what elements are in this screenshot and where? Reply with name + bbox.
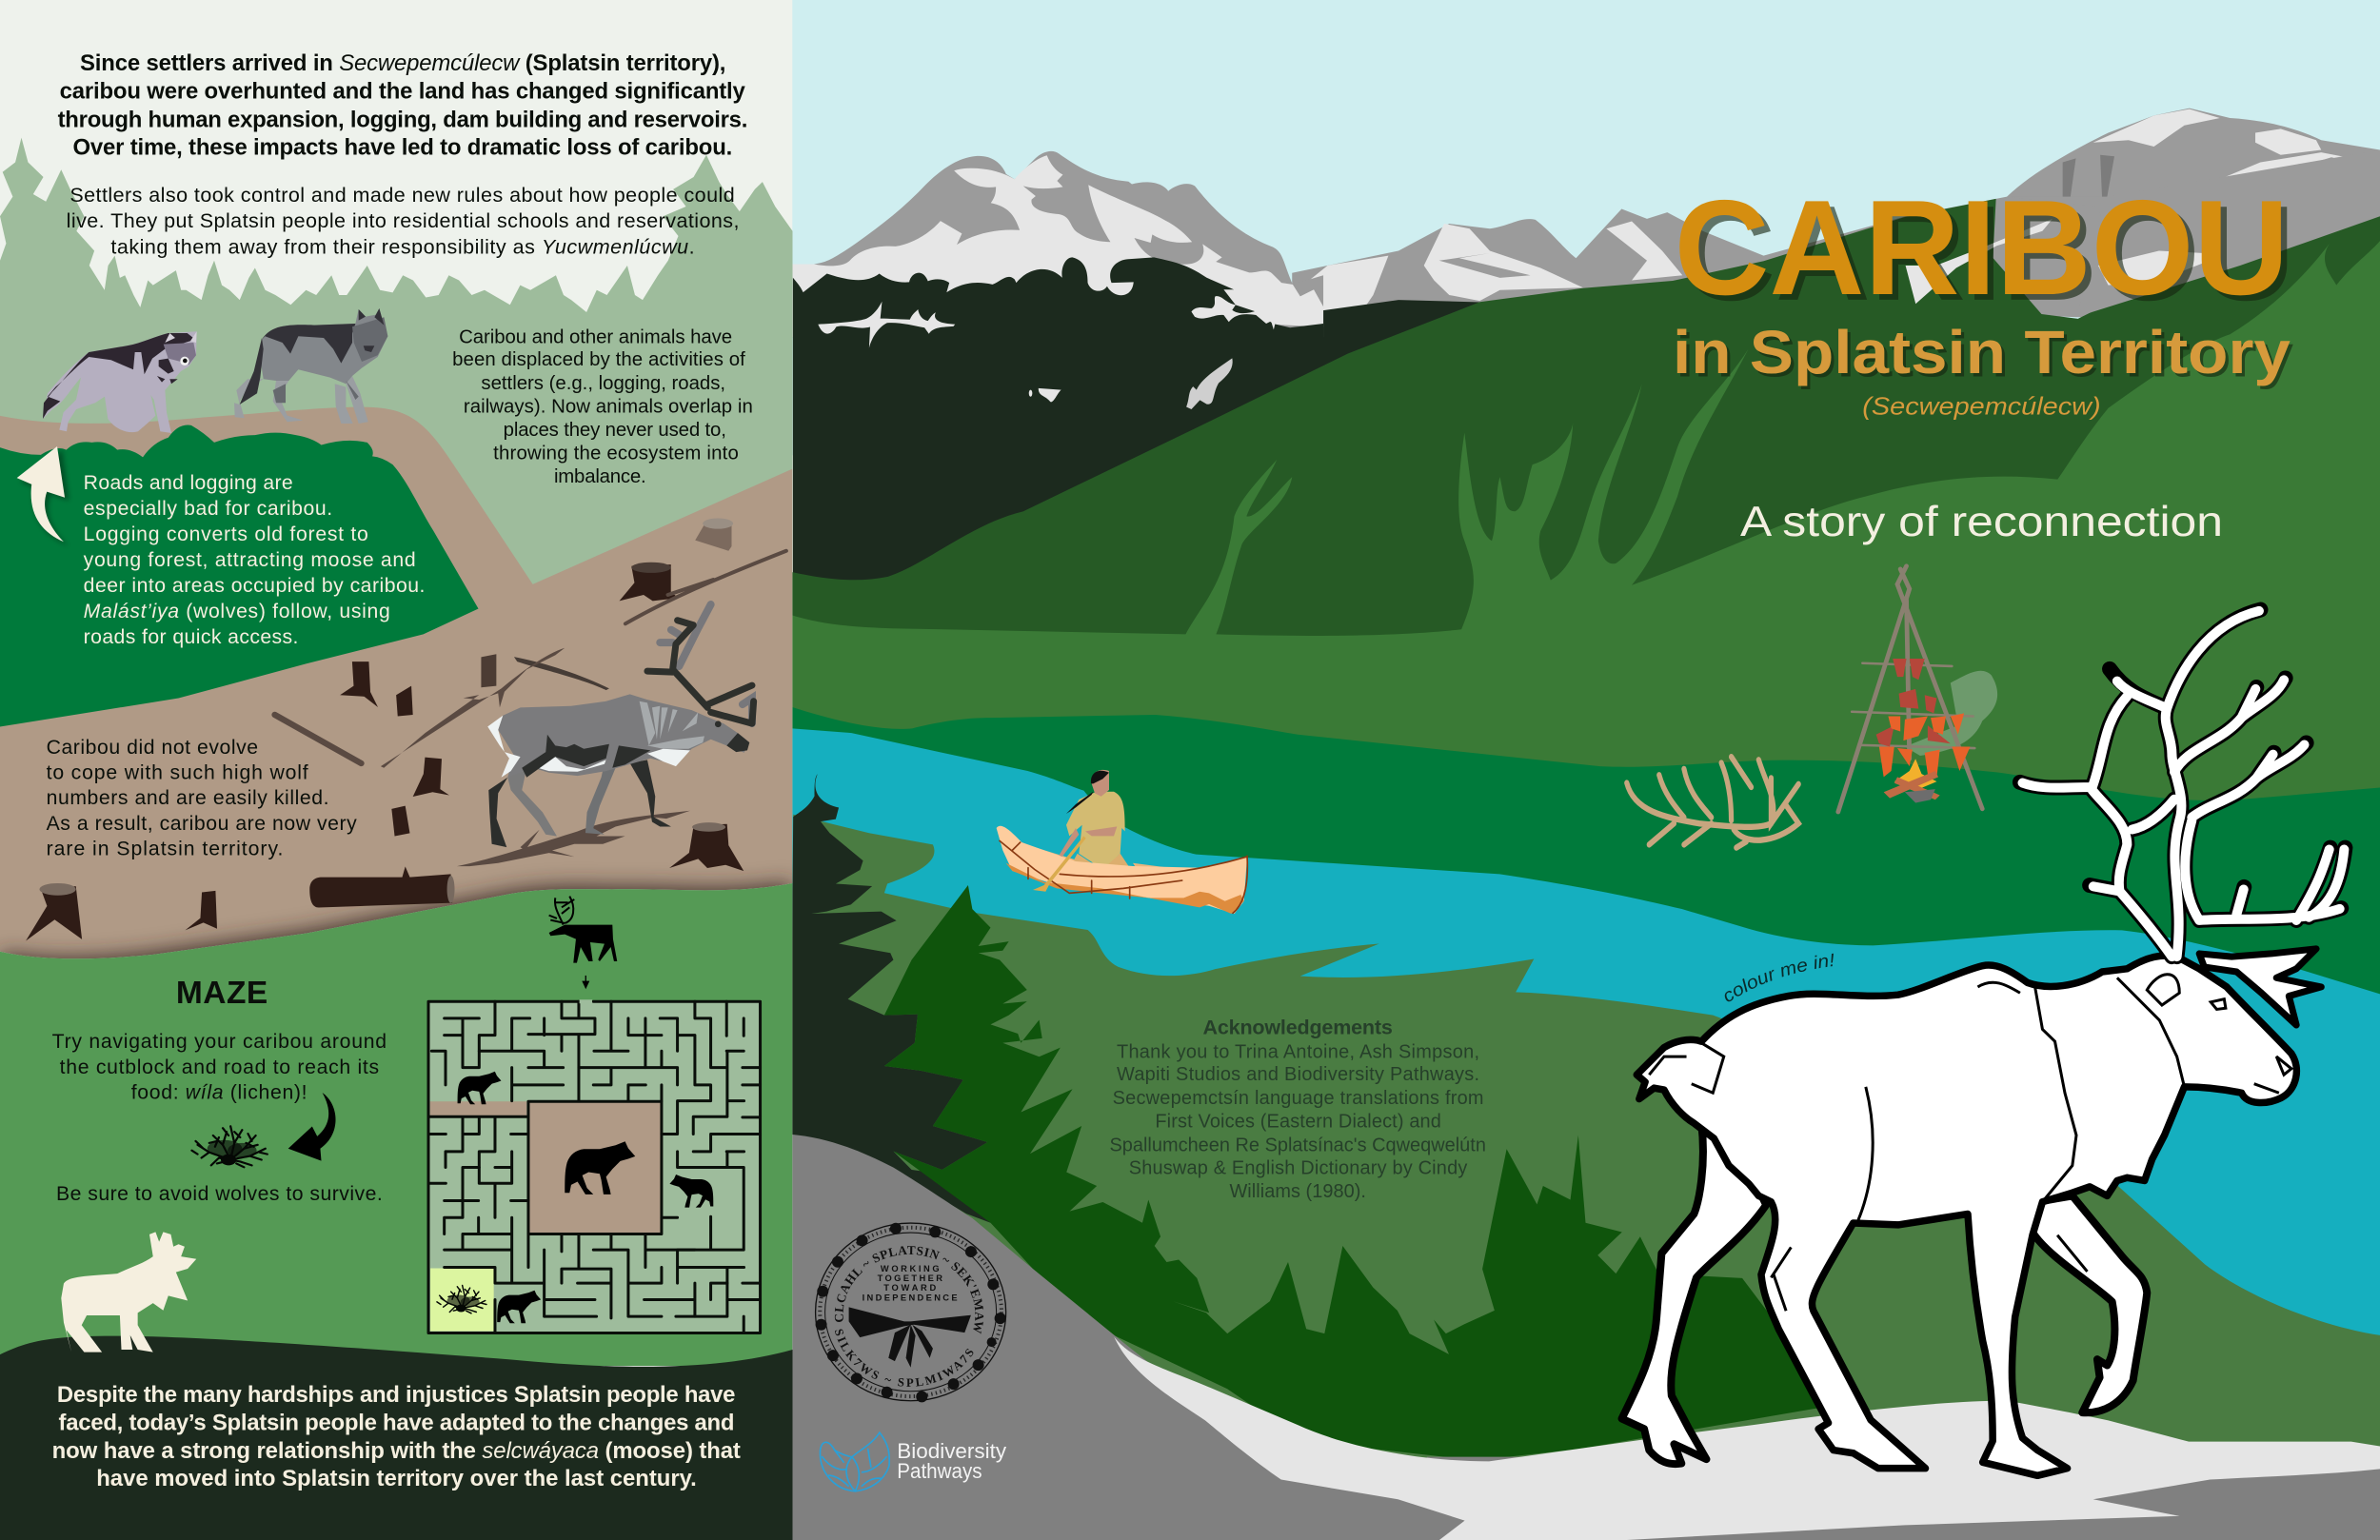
white rump and belly bbox=[487, 716, 690, 778]
crossbars bbox=[1852, 663, 1974, 748]
seal motto: TOWARD bbox=[883, 1283, 937, 1293]
text: moose relationship: now have a strong relationship with the selcwáyaca (moose) that bbox=[52, 1438, 741, 1464]
seal lettering bbox=[843, 1254, 975, 1335]
text: acknowledgements: Williams (1980). bbox=[1229, 1181, 1366, 1202]
snowy ground bbox=[1114, 1337, 2380, 1540]
text: roads and logging: especially bad for caribou. bbox=[84, 498, 332, 520]
seal motto: WORKING bbox=[881, 1264, 940, 1273]
body bbox=[498, 694, 749, 778]
canoe lines bbox=[1000, 840, 1247, 913]
leaf mark bbox=[820, 1432, 889, 1491]
text: caribou rare: Caribou did not evolve bbox=[47, 737, 258, 759]
antlers bbox=[660, 604, 752, 723]
mountains right range bbox=[1292, 109, 2380, 443]
text: settlers: Settlers also took control and made new rules about how people could bbox=[69, 184, 735, 207]
logo: Biodiversity Pathways bbox=[820, 1432, 1007, 1491]
paddle bbox=[1033, 836, 1086, 892]
antlers fill bbox=[2023, 611, 2344, 957]
antlers outline bbox=[2020, 610, 2345, 957]
text: moose relationship bbox=[52, 1382, 741, 1491]
text: maze instructions: the cutblock and road to reach its bbox=[60, 1056, 379, 1078]
text: intro: through human expansion, logging, dam building and reservoirs. bbox=[58, 107, 747, 132]
icon: curved arrow bbox=[17, 446, 69, 545]
sky bbox=[789, 0, 2380, 455]
road and cutblock bbox=[0, 407, 792, 958]
text: roads and logging bbox=[84, 472, 425, 648]
icon: fish drying rack bbox=[1838, 566, 1997, 812]
text: intro: Over time, these impacts have led to dramatic loss of caribou. bbox=[73, 135, 732, 161]
fallen branches bbox=[275, 551, 786, 866]
text: acknowledgements: Wapiti Studios and Biodiversity Pathways. bbox=[1117, 1064, 1479, 1085]
icon: maze entry arrow bbox=[582, 976, 589, 989]
bright green meadow bbox=[792, 707, 2380, 1017]
paddler bbox=[1050, 770, 1133, 878]
subtitle: in Splatsin Territory bbox=[1676, 321, 2294, 389]
tagline: A story of reconnection bbox=[1740, 499, 2223, 545]
icon: caribou silhouette bbox=[549, 897, 617, 963]
snow patches bbox=[1191, 296, 1277, 329]
far foreleg bbox=[2033, 1195, 2147, 1412]
dark base bbox=[0, 1336, 793, 1540]
muzzle bbox=[726, 733, 749, 752]
mid green hillside bbox=[793, 815, 2380, 1536]
colouring caribou bbox=[1622, 610, 2345, 1475]
rock bbox=[790, 151, 1323, 337]
text: caribou rare: As a result, caribou are now very bbox=[47, 813, 357, 835]
text: roads and logging: Logging converts old forest to bbox=[84, 523, 368, 545]
text: roads and logging: roads for quick access. bbox=[84, 626, 298, 648]
dark green slope bbox=[792, 199, 2380, 682]
logo wordmark: Pathways bbox=[897, 1459, 982, 1483]
text: acknowledgements: Spallumcheen Re Splatsínac's Cqweqwelútn bbox=[1109, 1135, 1486, 1155]
text: moose relationship: Despite the many hardships and injustices Splatsin people have bbox=[57, 1382, 735, 1408]
mountain left massif bbox=[790, 151, 1323, 609]
text: displaced bbox=[452, 326, 753, 487]
text: intro bbox=[58, 50, 747, 161]
text: acknowledgements bbox=[1109, 1016, 1486, 1202]
road shadow bbox=[0, 896, 792, 971]
poles bbox=[1838, 566, 1982, 812]
feather ring bbox=[816, 1223, 1006, 1401]
seal motto bbox=[863, 1264, 958, 1303]
cutblock bbox=[528, 1101, 662, 1234]
text: maze instructions: Be sure to avoid wolves to survive. bbox=[56, 1183, 383, 1205]
icon: moose bbox=[61, 1232, 196, 1352]
stumps and logs bbox=[26, 518, 744, 941]
grey rock bbox=[790, 1135, 1465, 1540]
text: displaced: been displaced by the activities of bbox=[452, 349, 745, 370]
text: roads and logging: deer into areas occupied by caribou. bbox=[84, 575, 425, 597]
logo: Splatsin seal: CLCAHL ~ SPLATSIN ~ SEK'EMAWS bbox=[834, 1246, 984, 1334]
road band bbox=[430, 1101, 526, 1116]
icon: shed antlers bbox=[1627, 757, 1798, 848]
icon: person in canoe bbox=[997, 770, 1247, 914]
green forest block bbox=[0, 424, 479, 727]
icon: lichen in goal bbox=[437, 1286, 486, 1313]
text: roads and logging: young forest, attracting moose and bbox=[84, 549, 416, 571]
text: displaced: throwing the ecosystem into bbox=[493, 444, 739, 464]
logo wordmark bbox=[897, 1439, 1007, 1483]
text: caribou rare: to cope with such high wolf bbox=[47, 762, 308, 784]
icon: black arrow to lichen bbox=[288, 1093, 336, 1161]
seal feathers bbox=[849, 1307, 971, 1368]
text: intro: Since settlers arrived in Secwepemcúlecw (Splatsin territory), bbox=[80, 50, 725, 76]
text: acknowledgements: First Voices (Eastern Dialect) and bbox=[1155, 1112, 1441, 1133]
text: settlers: taking them away from their responsibility as Yucwmenlúcwu. bbox=[110, 235, 695, 258]
dark belly bbox=[522, 735, 650, 778]
antler palm bbox=[2199, 949, 2321, 1025]
text: displaced: Caribou and other animals have bbox=[459, 326, 732, 347]
text: acknowledgements: Acknowledgements bbox=[1203, 1016, 1393, 1038]
logo: Splatsin seal: SILK7WS ~ SPLMIWA7S bbox=[835, 1329, 973, 1387]
maze walls bbox=[428, 1001, 761, 1333]
text: acknowledgements: Secwepemctsín language translations from bbox=[1113, 1088, 1484, 1109]
subtitle: in Splatsin Territory bbox=[1673, 318, 2291, 386]
panel background bbox=[0, 0, 792, 1540]
maze bbox=[428, 999, 761, 1333]
logo: Splatsin seal bbox=[815, 1222, 1007, 1403]
panel: landscape scene bbox=[789, 0, 2380, 1540]
text: caribou rare: numbers and are easily killed. bbox=[47, 787, 329, 809]
sage tree line bbox=[0, 138, 793, 738]
text: acknowledgements: Shuswap & English Dictionary by Cindy bbox=[1129, 1158, 1467, 1179]
river bbox=[792, 728, 2380, 1457]
text: maze instructions: Try navigating your caribou around bbox=[52, 1031, 387, 1053]
text: acknowledgements: Thank you to Trina Antoine, Ash Simpson, bbox=[1117, 1041, 1479, 1062]
text: caribou rare bbox=[47, 737, 357, 860]
text: caribou rare: rare in Splatsin territory. bbox=[47, 839, 283, 860]
maze entry bbox=[580, 999, 592, 1003]
goal box bbox=[430, 1269, 494, 1331]
text: intro: caribou were overhunted and the land has changed significantly bbox=[60, 78, 746, 104]
icon: wolf light bbox=[43, 331, 197, 433]
text: roads and logging: Malást’iya (wolves) follow, using bbox=[84, 601, 390, 622]
text: displaced: places they never used to, bbox=[504, 420, 726, 441]
text: moose relationship: faced, today’s Splatsin people have adapted to the changes and bbox=[59, 1410, 735, 1435]
icon: lichen bbox=[191, 1126, 268, 1167]
legs bbox=[488, 760, 671, 847]
snow patches behind the title bbox=[1906, 150, 2380, 317]
smoke bbox=[1905, 671, 1997, 756]
forest bbox=[884, 885, 1822, 1460]
seal motto: INDEPENDENCE bbox=[863, 1293, 958, 1303]
far hind leg bbox=[1622, 1123, 1766, 1464]
fire bbox=[1894, 759, 1936, 789]
text: displaced: imbalance. bbox=[554, 466, 646, 487]
canoe interior bbox=[1019, 842, 1193, 873]
subtitle language name: (Secwepemcúlecw) bbox=[1862, 393, 2101, 420]
icon: wolf grey bbox=[234, 308, 387, 424]
dark tree left bbox=[790, 774, 990, 1223]
text: displaced: settlers (e.g., logging, roads, bbox=[481, 373, 725, 394]
heading: maze: MAZE bbox=[176, 976, 268, 1011]
canoe hull bbox=[997, 826, 1247, 914]
icon: grey caribou bbox=[487, 604, 754, 847]
text: moose relationship: have moved into Splatsin territory over the last century. bbox=[96, 1466, 697, 1491]
fish bbox=[1876, 659, 1951, 746]
icon: wolves in maze bbox=[458, 1072, 713, 1323]
medium green bbox=[0, 883, 792, 1366]
title: CARIBOU bbox=[1675, 173, 2289, 324]
dark mountain bbox=[793, 257, 1323, 609]
text: maze instructions: food: wíla (lichen)! bbox=[131, 1082, 307, 1104]
grey foreground bbox=[1427, 1457, 2380, 1540]
logo wordmark: Biodiversity bbox=[897, 1439, 1007, 1463]
seal motto: TOGETHER bbox=[878, 1273, 942, 1283]
text: displaced: railways). Now animals overlap in bbox=[464, 397, 753, 418]
detail lines bbox=[1649, 975, 2291, 1311]
text: settlers: live. They put Splatsin people into residential schools and reservations, bbox=[67, 209, 739, 232]
maze floor bbox=[428, 1001, 761, 1333]
panel: left story panel bbox=[0, 0, 793, 1540]
title: CARIBOU bbox=[1680, 179, 2295, 329]
text: settlers bbox=[67, 184, 739, 258]
snow bbox=[790, 155, 1323, 337]
neck fur bbox=[640, 701, 704, 749]
text: colour me in: colour me in! bbox=[1725, 954, 1834, 1001]
light green foreground bbox=[790, 241, 2380, 983]
text: maze instructions bbox=[52, 1031, 387, 1205]
text: roads and logging: Roads and logging are bbox=[84, 472, 293, 494]
feather knots bbox=[816, 1223, 1006, 1402]
body and head bbox=[1636, 956, 2296, 1475]
